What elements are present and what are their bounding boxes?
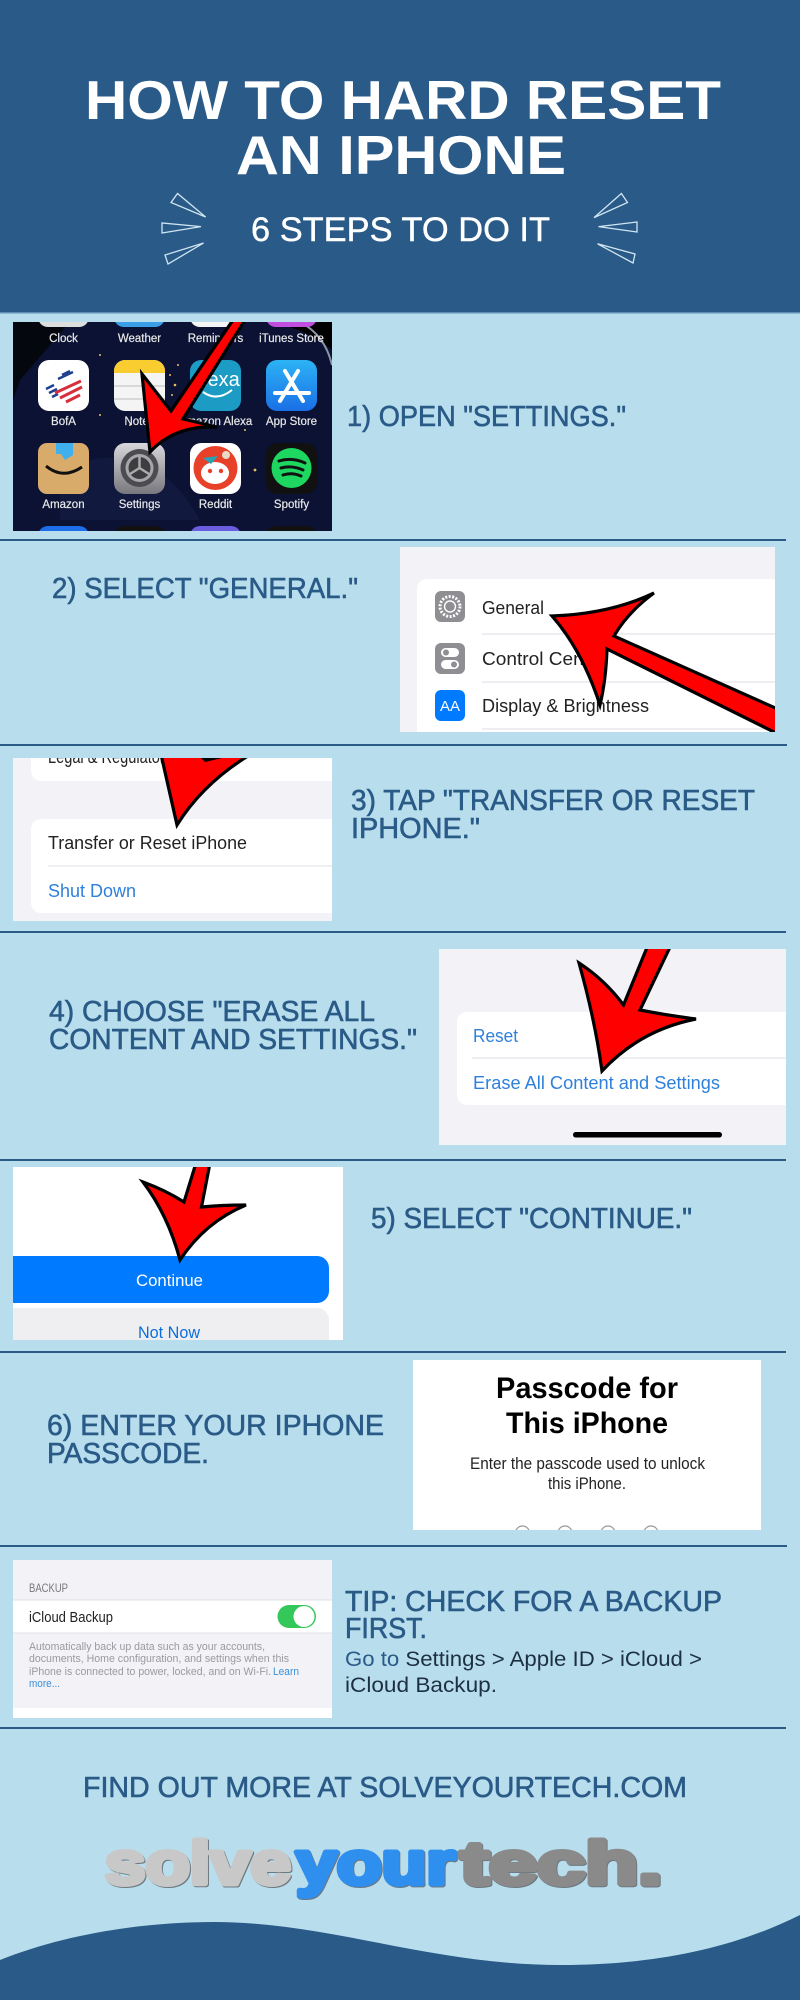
button: Not Now (13, 1308, 329, 1340)
home indicator (573, 1132, 722, 1138)
row of partial icons, bottom (39, 526, 316, 531)
panel: step 3 screenshot (13, 758, 332, 921)
icon labels: Weather (118, 333, 161, 345)
icon labels: Amazon (42, 499, 85, 511)
step 6 text: 6) ENTER YOUR IPHONE (47, 1410, 384, 1442)
icon: Spotify (266, 443, 317, 494)
icon: Reddit (190, 443, 241, 494)
step 3 text (351, 785, 755, 845)
panel: step 3 screenshot: Shut Down (48, 881, 136, 901)
panel: step 4 screenshot: Erase All Content and Settings (473, 1073, 720, 1093)
icon labels: Settings (119, 499, 161, 511)
divider (0, 1351, 786, 1353)
title (85, 69, 721, 186)
toggle (278, 1605, 316, 1628)
panel: step 6 screenshot: Enter the passcode used to unlock (470, 1454, 705, 1473)
icon labels: BofA (51, 416, 76, 428)
divider (0, 1159, 786, 1161)
panel: step 6 screenshot: Passcode for (496, 1372, 678, 1405)
icon labels: App Store (266, 416, 317, 428)
title: AN IPHONE (236, 124, 566, 186)
tip text: TIP: CHECK FOR A BACKUP (345, 1586, 722, 1618)
icon: Notes (114, 360, 165, 411)
icon: General (435, 591, 465, 622)
logo: tech. (460, 1830, 662, 1897)
row of partial icons, top (39, 322, 316, 327)
panel: step 6 screenshot (413, 1360, 761, 1540)
panel: step 2 screenshot: Display & Brightness (482, 696, 649, 716)
step 1 text: 1) OPEN "SETTINGS." (347, 401, 626, 433)
step 6 text: PASSCODE. (47, 1438, 209, 1470)
tip text (345, 1586, 722, 1697)
panel: tip screenshot: Automatically back up data such as your accounts, (29, 1641, 265, 1653)
panel: step 4 screenshot: Reset (473, 1026, 518, 1046)
panel: tip screenshot: BACKUP (29, 1581, 68, 1595)
panel: step 3 screenshot: Legal & Regulatory (48, 747, 172, 767)
icon: Settings (114, 443, 165, 494)
header banner (0, 0, 800, 314)
panel: tip screenshot: documents, Home configuration, and settings when this (29, 1653, 289, 1665)
icon: Alexa: lexa (203, 369, 241, 391)
tip text: FIRST. (345, 1613, 427, 1645)
icon: App Store (266, 360, 317, 411)
panel: step 1 screenshot (13, 322, 332, 531)
panel: tip screenshot: more... (29, 1678, 60, 1690)
arrow: step 5 (143, 1163, 246, 1260)
icon labels: Reddit (199, 499, 233, 511)
icon: left burst (162, 194, 206, 264)
arrow: step 1 (142, 320, 245, 452)
divider (0, 931, 786, 933)
icon labels (42, 333, 324, 511)
panel: step 3 screenshot: Transfer or Reset iPhone (48, 833, 247, 853)
footer wave (0, 1915, 800, 2000)
icon: Display: AA (440, 698, 460, 715)
arrow: step 2 (552, 593, 782, 736)
logo (105, 1830, 662, 1897)
panel: step 6 screenshot: this iPhone. (548, 1474, 626, 1493)
icon labels: Notes (124, 416, 155, 428)
panel: step 2 screenshot (400, 547, 775, 732)
icon: Amazon (38, 443, 89, 494)
icon: BofA (38, 360, 89, 411)
subtitle: 6 STEPS TO DO IT (251, 211, 550, 249)
icon: Display (435, 690, 465, 721)
arrow: step 3 (160, 758, 248, 829)
title: HOW TO HARD RESET (85, 69, 721, 131)
step 5 text: 5) SELECT "CONTINUE." (371, 1203, 692, 1235)
arrow: step 4 (579, 945, 696, 1071)
divider (0, 539, 786, 541)
icon: Alexa (190, 360, 241, 411)
step 3 text: IPHONE." (351, 813, 480, 845)
icon labels: iTunes Store (259, 333, 324, 345)
step 4 text: CONTENT AND SETTINGS." (49, 1024, 417, 1056)
button: Not Now: Not Now (138, 1323, 201, 1342)
step 6 text (47, 1410, 384, 1470)
panel: step 5 screenshot (13, 1163, 343, 1345)
button: Continue: Continue (136, 1271, 203, 1290)
icon labels: Clock (49, 333, 78, 345)
icon labels: Spotify (274, 499, 309, 511)
divider (0, 744, 787, 746)
step 2 text: 2) SELECT "GENERAL." (52, 573, 358, 605)
icon: Control Center (435, 643, 465, 674)
tip text: Go to Settings > Apple ID > iCloud > (345, 1648, 702, 1671)
panel: tip screenshot: iCloud Backup (29, 1609, 113, 1626)
icon labels: Reminders (188, 333, 244, 345)
button: Continue (13, 1256, 329, 1303)
panel: step 2 screenshot: Control Center (482, 649, 606, 669)
divider (0, 1545, 787, 1547)
icon: right burst (594, 194, 637, 263)
panel: step 2 screenshot: General (482, 598, 544, 618)
step 4 text (49, 996, 417, 1056)
panel: tip screenshot: Learn (273, 1666, 299, 1678)
tip text: iCloud Backup. (345, 1674, 497, 1697)
step 4 text: 4) CHOOSE "ERASE ALL (49, 996, 375, 1028)
icon labels: Amazon Alexa (179, 416, 253, 428)
panel: tip screenshot (13, 1560, 332, 1718)
panel: step 6 screenshot: This iPhone (506, 1407, 668, 1440)
step 3 text: 3) TAP "TRANSFER OR RESET (351, 785, 755, 817)
passcode dots (516, 1525, 658, 1530)
divider (0, 1727, 786, 1729)
logo: solve (105, 1830, 291, 1897)
panel: step 4 screenshot (439, 945, 800, 1145)
panel: tip screenshot: iPhone is connected to power, locked, and on Wi-Fi. (29, 1666, 271, 1678)
logo: your (296, 1830, 455, 1897)
footer call to action: FIND OUT MORE AT SOLVEYOURTECH.COM (83, 1772, 687, 1804)
